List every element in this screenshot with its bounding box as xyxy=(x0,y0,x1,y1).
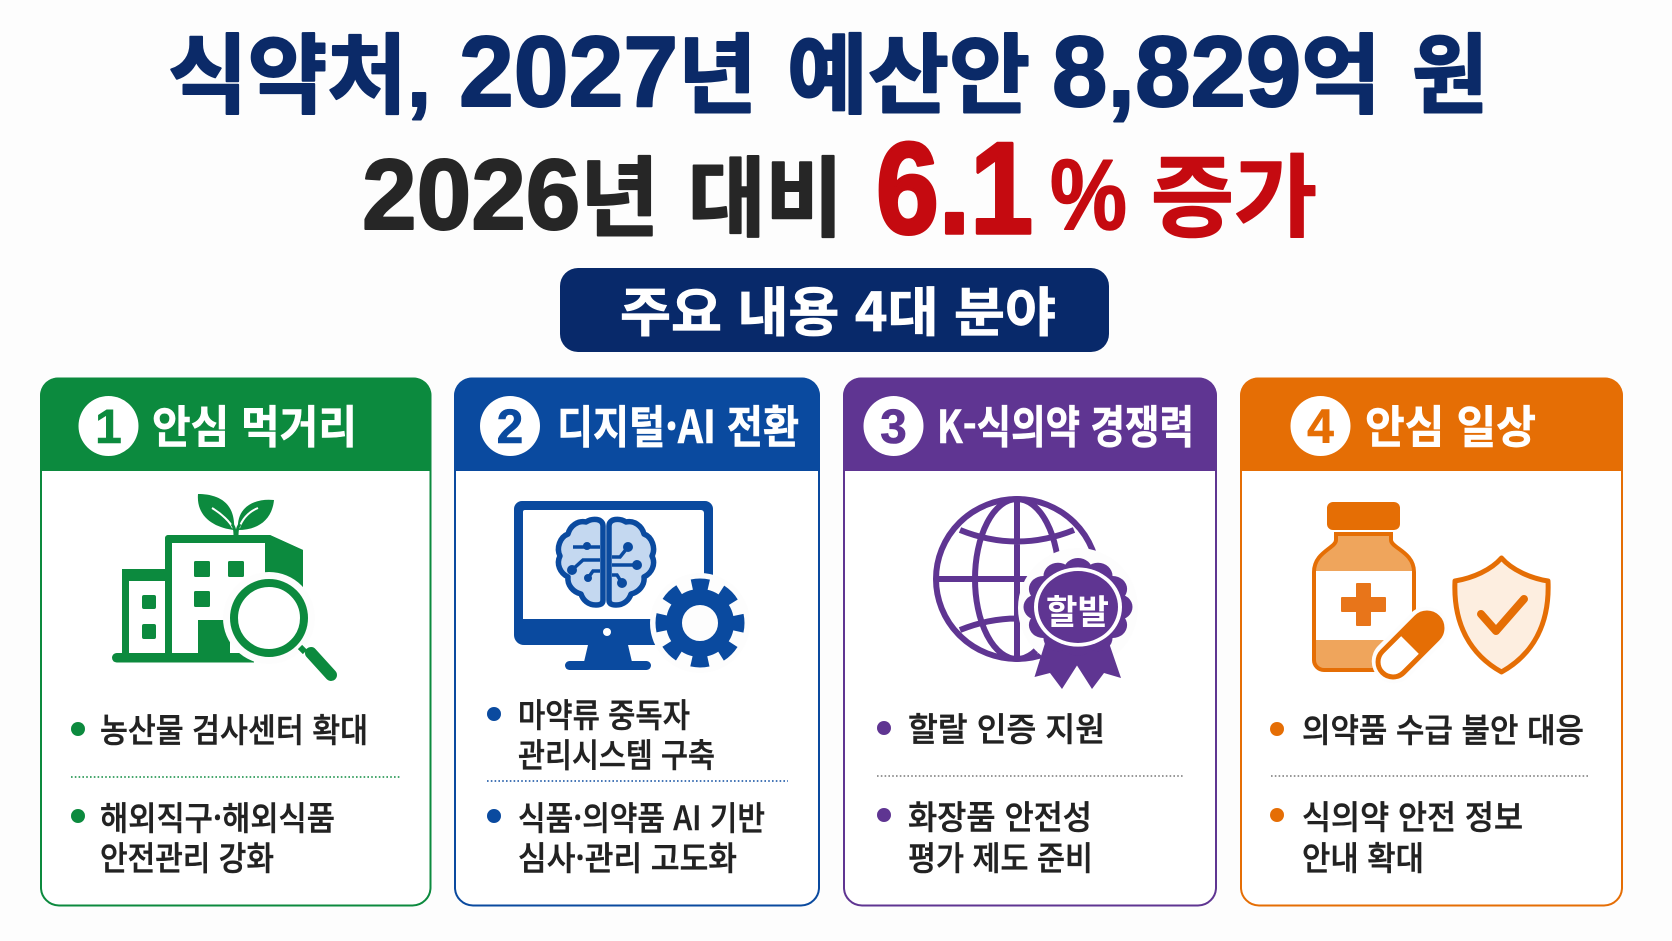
icon: globe and halal badge xyxy=(936,499,1138,689)
section heading pill xyxy=(560,268,1109,352)
bullet list: 심사·관리 고도화 xyxy=(518,832,737,880)
subtitle: 6.1 percent increase: 증가 xyxy=(1151,149,1317,249)
subtitle: 6.1 percent increase xyxy=(362,115,1317,261)
heading: safe daily life: 안심 일상 xyxy=(1365,391,1536,456)
subtitle: 6.1 percent increase: 대비 xyxy=(688,151,843,248)
bullet list: 관리시스템 구축 xyxy=(518,729,715,777)
card header purple xyxy=(843,378,1217,471)
panel: 1 safe food xyxy=(40,378,432,906)
bullet list: 식품·의약품 AI 기반 xyxy=(518,792,765,840)
bullet list xyxy=(1270,704,1588,880)
number badge 4: 4 xyxy=(1307,401,1334,454)
heading: K competitiveness: K-식의약 경쟁력 xyxy=(937,391,1194,456)
card frame blue xyxy=(455,378,819,906)
card frame orange xyxy=(1241,378,1622,906)
card header green xyxy=(40,378,432,471)
title: budget headline: 원 xyxy=(1412,28,1488,125)
card header orange xyxy=(1240,378,1623,471)
number badge 3: 3 xyxy=(880,401,907,454)
bullet list: 마약류 중독자 xyxy=(518,689,690,737)
bullet list: 할랄 인증 지원 xyxy=(908,703,1105,751)
bullet list xyxy=(877,703,1183,880)
number badge 2: 2 xyxy=(497,401,523,454)
bullet list: 농산물 검사센터 확대 xyxy=(100,704,368,752)
bullet list: 안전관리 강화 xyxy=(100,832,274,880)
bullet list xyxy=(487,689,788,880)
bullet list: 평가 제도 준비 xyxy=(908,832,1093,880)
number badge 2 xyxy=(480,396,540,456)
subtitle: 6.1 percent increase: % xyxy=(1050,139,1127,251)
heading: safe food: 안심 먹거리 xyxy=(152,391,357,456)
section heading pill: 주요 내용 4대 분야 xyxy=(620,271,1056,347)
icon: medicine bottle, capsule and shield xyxy=(1314,502,1548,692)
number badge 1 xyxy=(78,396,138,456)
number badge 3 xyxy=(864,396,924,456)
card frame purple xyxy=(844,378,1216,906)
bullet list xyxy=(71,704,401,880)
title: budget headline: 2027년 xyxy=(459,16,757,128)
panel: 3 K-food and drug competitiveness xyxy=(843,378,1217,906)
icon: monitor, brain and gear xyxy=(514,501,750,673)
panel: 2 digital and AI xyxy=(454,378,820,906)
bullet list: 화장품 안전성 xyxy=(908,791,1092,839)
title: budget headline xyxy=(168,16,1488,128)
subtitle: 6.1 percent increase: 6.1 xyxy=(876,115,1033,261)
icon: building with leaves and magnifier xyxy=(112,494,331,675)
number badge 4 xyxy=(1290,396,1350,456)
card header blue xyxy=(454,378,820,471)
number badge 1: 1 xyxy=(95,401,122,454)
bullet list: 해외직구·해외식품 xyxy=(100,792,335,840)
icon: globe and halal badge: 할발 xyxy=(1046,585,1109,634)
heading: digital AI: 디지털·AI 전환 xyxy=(557,391,799,456)
card frame green xyxy=(41,378,430,906)
bullet list: 의약품 수급 불안 대응 xyxy=(1302,704,1584,752)
bullet list: 식의약 안전 정보 xyxy=(1302,791,1523,839)
title: budget headline: 예산안 xyxy=(787,28,1030,125)
title: budget headline: 8,829억 xyxy=(1052,16,1381,128)
panel: 4 safe daily life xyxy=(1240,378,1623,906)
bullet list: 안내 확대 xyxy=(1302,832,1424,880)
subtitle: 6.1 percent increase: 2026년 xyxy=(362,139,659,251)
title: budget headline: 식약처, xyxy=(168,28,431,125)
